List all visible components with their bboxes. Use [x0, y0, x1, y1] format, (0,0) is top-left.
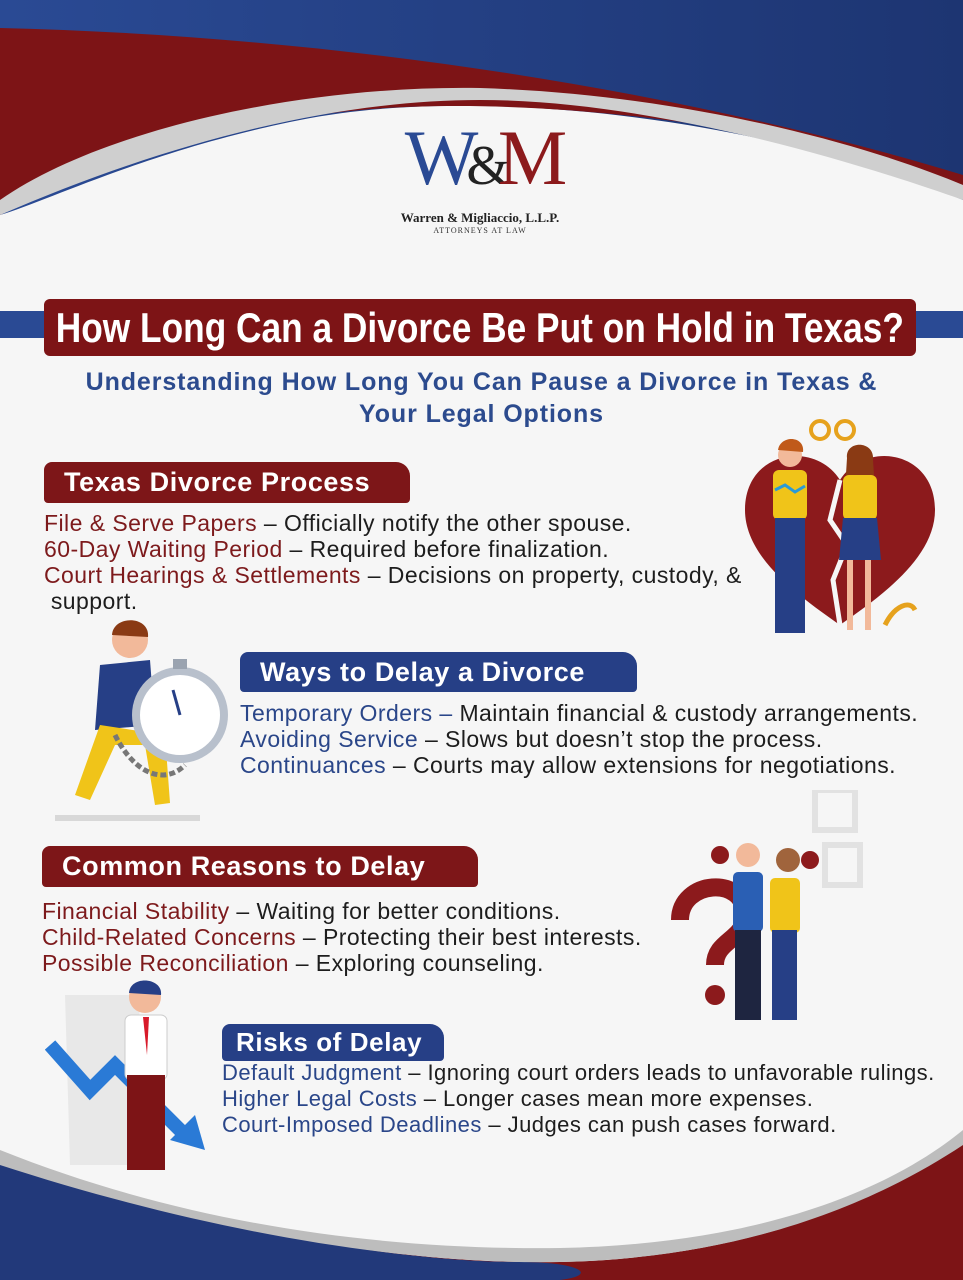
illustration: confused couple with question mark: [671, 790, 863, 1020]
text: process items: Court Hearings & Settlements – Decisions on property, custody, &: [44, 562, 742, 588]
text: delay ways: Continuances – Courts may allow extensions for negotiations.: [240, 752, 896, 778]
pill: Risks of Delay: Risks of Delay: [236, 1027, 422, 1057]
pill: Common Reasons: Common Reasons to Delay: [62, 851, 425, 881]
logo: Warren & Migliaccio, L.L.P.: [401, 210, 559, 225]
logo: [400, 114, 565, 235]
text: process items: [44, 510, 742, 614]
pill: Texas Divorce Process: Texas Divorce Process: [64, 467, 370, 497]
text: process items: support.: [51, 588, 138, 614]
text: reasons: Child-Related Concerns – Protecting their best interests.: [42, 924, 642, 950]
text: How Long Can a Divorce Be Put on Hold in Texas?: [56, 304, 904, 351]
subtitle: Your Legal Options: [359, 400, 604, 428]
text: reasons: [42, 898, 642, 976]
text: reasons: Possible Reconciliation – Exploring counseling.: [42, 950, 544, 976]
logo: ATTORNEYS AT LAW: [433, 226, 527, 235]
text: reasons: Financial Stability – Waiting for better conditions.: [42, 898, 561, 924]
subtitle: Understanding How Long You Can Pause a Divorce in Texas &: [86, 368, 877, 396]
text: risks: Default Judgment – Ignoring court orders leads to unfavorable rulings.: [222, 1060, 935, 1085]
pill: Texas Divorce Process: [44, 462, 410, 503]
illustration: couple with broken heart: [745, 419, 935, 633]
logo: W&M: [405, 114, 555, 201]
pill: Common Reasons: [42, 846, 478, 887]
subtitle: [86, 368, 877, 428]
pill: Ways to Delay: [240, 652, 637, 692]
text: risks: Court-Imposed Deadlines – Judges can push cases forward.: [222, 1112, 837, 1137]
text: process items: 60-Day Waiting Period – Required before finalization.: [44, 536, 609, 562]
text: delay ways: Avoiding Service – Slows but doesn’t stop the process.: [240, 726, 823, 752]
title bar: [0, 311, 963, 338]
pill: Risks of Delay: [222, 1024, 444, 1061]
illustration: man with stopwatch: [55, 620, 228, 821]
text: delay ways: [240, 700, 918, 778]
text: delay ways: Temporary Orders – Maintain financial & custody arrangements.: [240, 700, 918, 726]
illustration: man with downward arrow: [45, 980, 205, 1170]
text: risks: Higher Legal Costs – Longer cases mean more expenses.: [222, 1086, 813, 1111]
pill: Ways to Delay: Ways to Delay a Divorce: [260, 657, 585, 687]
text: process items: File & Serve Papers – Officially notify the other spouse.: [44, 510, 632, 536]
text: risks: [222, 1060, 935, 1137]
